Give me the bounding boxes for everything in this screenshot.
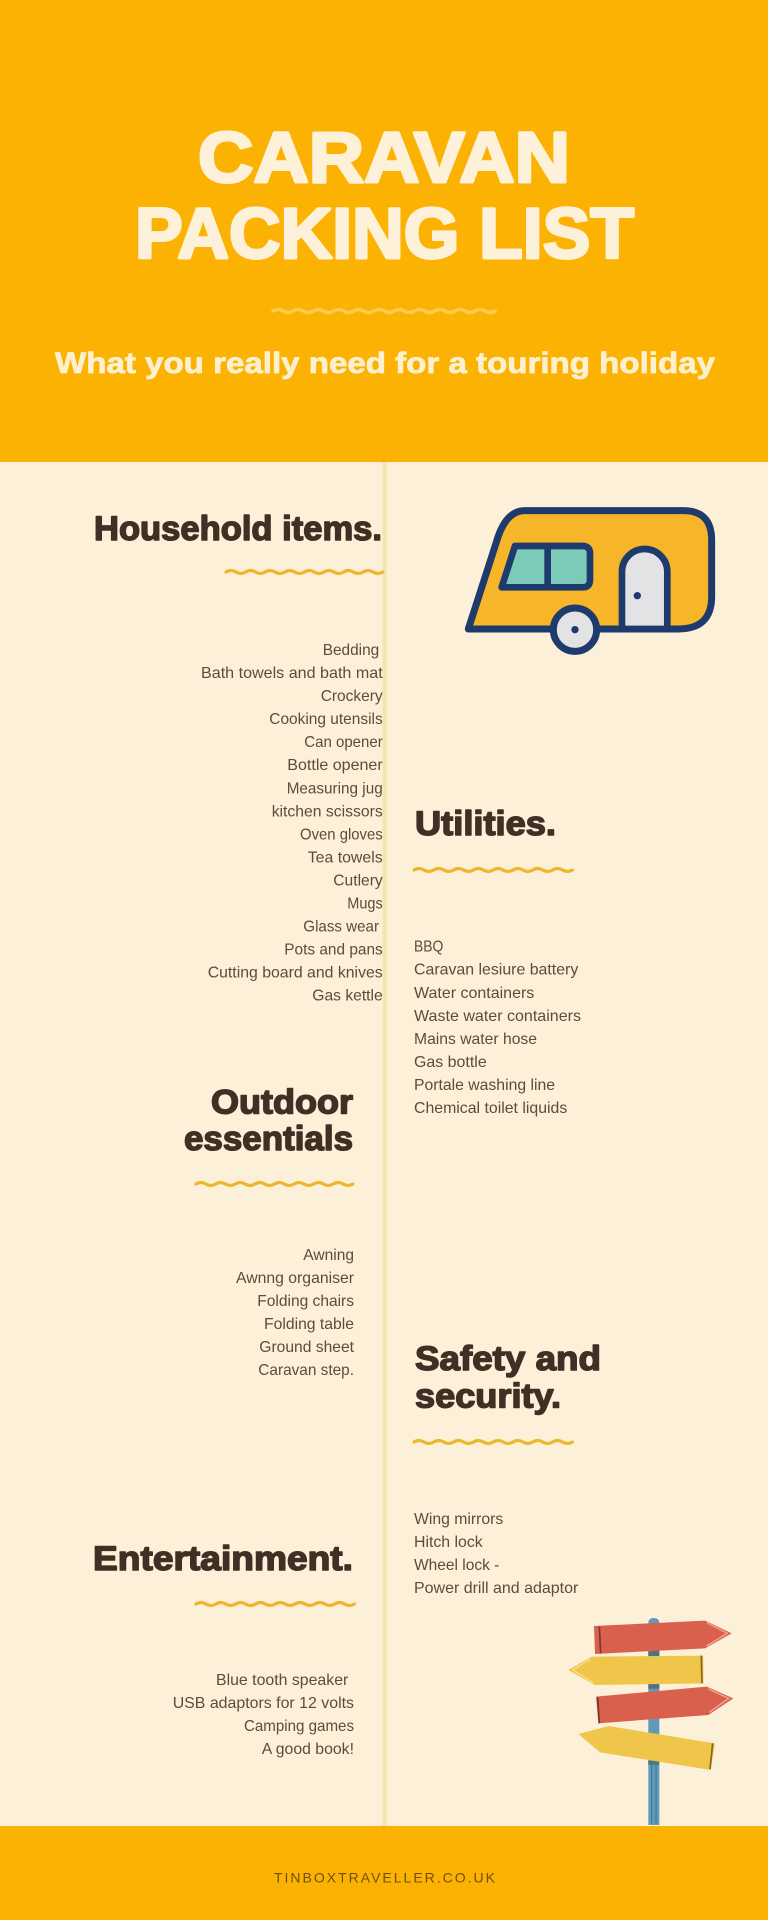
list: household items: Gas kettle xyxy=(312,988,383,1005)
list: household items: Glass wear xyxy=(303,919,380,936)
list: utilities: Water containers xyxy=(414,985,534,1002)
heading: safety and security: Safety and xyxy=(415,1340,601,1378)
list: outdoor essentials: Ground sheet xyxy=(259,1339,355,1356)
title xyxy=(135,119,634,274)
list: household items: Bath towels and bath mat xyxy=(201,665,383,682)
wave underline: safety xyxy=(414,1440,572,1444)
list: outdoor essentials: Folding table xyxy=(264,1316,354,1333)
list: household items: Can opener xyxy=(304,734,383,751)
panel: outdoor essentials xyxy=(184,1083,355,1379)
list: household items xyxy=(201,642,383,1005)
icon: signpost xyxy=(568,1618,733,1825)
list: utilities: Chemical toilet liquids xyxy=(414,1100,567,1117)
list: safety and security xyxy=(414,1511,579,1597)
heading: outdoor essentials xyxy=(184,1083,353,1158)
list: household items: Tea towels xyxy=(308,849,383,866)
list: utilities: Mains water hose xyxy=(414,1031,537,1048)
title: CARAVAN xyxy=(198,119,570,198)
wave underline: household xyxy=(226,570,383,574)
panel: header banner xyxy=(0,0,768,462)
panel: safety and security xyxy=(414,1340,601,1597)
list: safety and security: Hitch lock xyxy=(414,1534,484,1551)
panel: entertainment xyxy=(93,1540,354,1758)
wave underline: outdoor xyxy=(196,1182,353,1186)
list: household items: Bottle opener xyxy=(287,757,383,774)
list: safety and security: Wing mirrors xyxy=(414,1511,503,1528)
list: utilities xyxy=(414,939,581,1117)
list: household items: Cutting board and knives xyxy=(208,965,383,982)
heading: household items: Household items. xyxy=(94,510,382,548)
list: utilities: Caravan lesiure battery xyxy=(414,962,578,979)
list: outdoor essentials: Awnng organiser xyxy=(236,1270,355,1287)
heading: outdoor essentials: essentials xyxy=(184,1120,353,1158)
list: household items: Crockery xyxy=(321,688,383,705)
list: entertainment: USB adaptors for 12 volts xyxy=(173,1695,354,1712)
list: household items: Measuring jug xyxy=(287,780,383,797)
icon: caravan xyxy=(468,511,712,651)
list: entertainment: Blue tooth speaker xyxy=(216,1672,349,1689)
list: safety and security: Wheel lock - xyxy=(414,1557,499,1574)
list: outdoor essentials: Folding chairs xyxy=(257,1293,354,1310)
wave underline: utilities xyxy=(414,868,572,872)
list: utilities: Gas bottle xyxy=(414,1054,487,1071)
list: utilities: Waste water containers xyxy=(414,1008,581,1025)
list: household items: Mugs xyxy=(347,896,383,912)
list: entertainment: Camping games xyxy=(244,1718,354,1735)
subtitle: What you really need for a touring holiday xyxy=(55,347,715,380)
list: household items: kitchen scissors xyxy=(272,803,383,820)
list: household items: Cutlery xyxy=(333,872,383,890)
heading: entertainment: Entertainment. xyxy=(93,1540,353,1578)
footer website text: TINBOXTRAVELLER.CO.UK xyxy=(274,1870,496,1886)
title: PACKING LIST xyxy=(135,195,634,274)
list: outdoor essentials: Caravan step. xyxy=(258,1362,354,1379)
heading: safety and security xyxy=(415,1340,601,1415)
panel: footer xyxy=(0,1826,768,1920)
list: outdoor essentials xyxy=(236,1247,355,1379)
panel: utilities xyxy=(414,805,581,1117)
list: utilities: Portale washing line xyxy=(414,1077,555,1094)
list: entertainment xyxy=(173,1672,354,1758)
heading: safety and security: security. xyxy=(415,1377,561,1415)
list: household items: Oven gloves xyxy=(300,826,383,843)
list: safety and security: Power drill and adaptor xyxy=(414,1580,579,1597)
panel: household items xyxy=(94,510,383,1005)
wave underline: entertainment xyxy=(196,1602,354,1606)
list: household items: Bedding xyxy=(323,642,379,659)
list: household items: Pots and pans xyxy=(284,942,383,959)
heading: outdoor essentials: Outdoor xyxy=(211,1083,353,1121)
list: utilities: BBQ xyxy=(414,939,443,956)
list: outdoor essentials: Awning xyxy=(303,1247,354,1264)
decorative wave under title xyxy=(273,310,495,312)
list: household items: Cooking utensils xyxy=(269,711,383,728)
list: entertainment: A good book! xyxy=(262,1741,354,1758)
heading: utilities: Utilities. xyxy=(415,805,556,843)
